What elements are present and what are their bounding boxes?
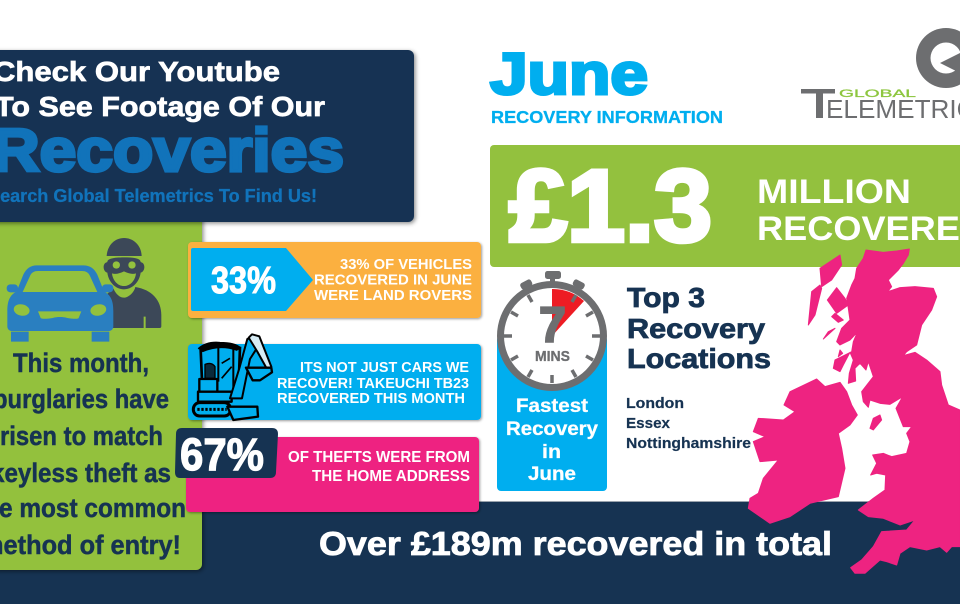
panel: 1.3 million recovered banner <box>490 145 960 267</box>
arrow: blue 33% pentagon <box>191 248 313 311</box>
subheading: recovery information: RECOVERY INFORMATION <box>491 107 723 127</box>
panel: burglary green panel <box>0 210 202 570</box>
panel: fastest recovery <box>497 271 607 491</box>
text: fastest recovery in june: Fastest <box>516 396 589 417</box>
icon: thief <box>104 238 161 328</box>
text: land rovers caption: 33% OF VEHICLES <box>340 257 472 273</box>
text: digger caption: RECOVER! TAKEUCHI TB23 <box>277 376 469 392</box>
text: land rovers caption: WERE LAND ROVERS <box>314 288 472 304</box>
text: home address caption: THE HOME ADDRESS <box>312 468 470 485</box>
text: million recovered: MILLION <box>757 173 911 211</box>
text: over £189m recovered in total: Over £189m recovered in total <box>319 525 832 562</box>
text: million recovered <box>757 173 960 248</box>
text: youtube heading <box>0 56 325 122</box>
text: home address caption <box>288 449 470 485</box>
text: top 3 location list: Nottinghamshire <box>626 436 751 452</box>
text: 33%: 33% <box>211 260 276 302</box>
text: fastest recovery in june: in <box>542 442 561 463</box>
text: digger caption: RECOVERED THIS MONTH <box>277 391 465 407</box>
text: youtube heading: To See Footage Of Our <box>0 91 325 122</box>
map: UK and Ireland <box>748 249 960 573</box>
heading: top 3 recovery locations: Recovery <box>627 313 765 344</box>
text: youtube heading: Check Our Youtube <box>0 56 280 87</box>
text: land rovers caption: RECOVERED IN JUNE <box>314 272 472 288</box>
text: £1.3: £1.3 <box>509 149 712 263</box>
text: burglaries message: This month, <box>13 348 149 378</box>
text: burglaries message: risen to match <box>0 421 163 451</box>
heading: top 3 recovery locations: Top 3 <box>627 282 705 313</box>
panel: 33% land rovers <box>188 242 481 318</box>
text: digger caption <box>277 360 469 407</box>
text: home address caption: OF THEFTS WERE FROM <box>288 449 470 466</box>
text: top 3 location list: London <box>626 396 684 412</box>
text: digger caption: ITS NOT JUST CARS WE <box>300 360 469 376</box>
bottom navy band <box>0 501 960 604</box>
icon: stopwatch 7 mins: MINS <box>535 348 570 365</box>
text: fastest recovery in june: Recovery <box>506 419 598 440</box>
text: recoveries: Recoveries <box>0 117 344 184</box>
panel: youtube call to action <box>0 50 414 222</box>
text: top 3 location list: Essex <box>626 416 670 432</box>
icon: car <box>7 265 113 342</box>
logo: global telemetrics: GLOBAL <box>839 88 916 100</box>
text: burglaries message <box>0 348 186 560</box>
badge: 67%: 67% <box>180 429 264 480</box>
text: fastest recovery in june <box>506 396 598 485</box>
icon: stopwatch 7 mins: 7 <box>539 297 566 353</box>
heading: June: June <box>490 42 648 107</box>
heading: top 3 recovery locations <box>627 282 771 374</box>
logo: global telemetrics <box>801 28 960 124</box>
heading: top 3 recovery locations: Locations <box>627 343 771 374</box>
icon: mini excavator <box>193 334 272 420</box>
panel: takeuchi digger <box>188 334 481 420</box>
text: top 3 location list <box>626 396 751 452</box>
text: fastest recovery in june: June <box>528 464 576 485</box>
icon: stopwatch 7 mins <box>500 271 604 388</box>
panel: 67% home address <box>175 428 479 512</box>
text: land rovers caption <box>314 257 472 304</box>
